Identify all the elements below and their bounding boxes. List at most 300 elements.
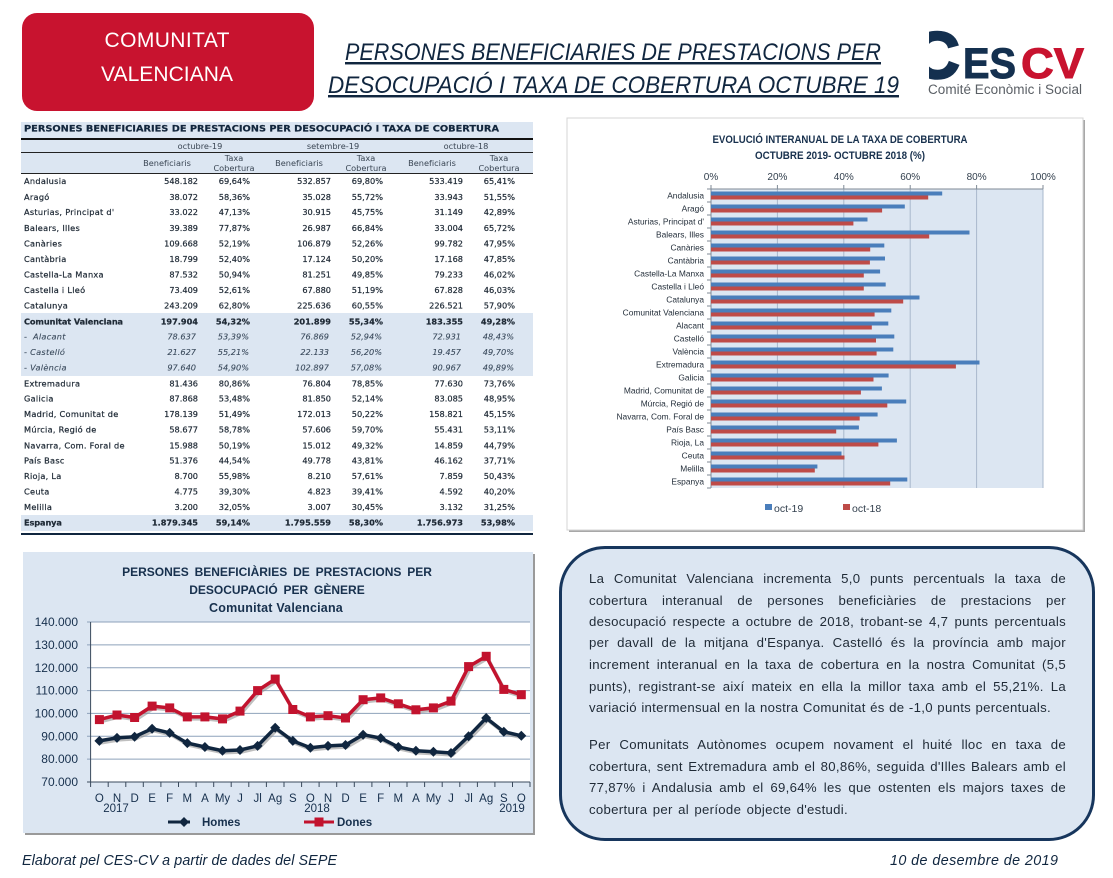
table row: País Basc: 43,81%	[352, 456, 383, 466]
line chart title	[122, 564, 432, 615]
line chart y axis labels: 80.000	[41, 752, 78, 766]
table row: Castelló: 49,70%	[483, 347, 514, 357]
table row: Alacant: 72.931	[432, 332, 461, 342]
table row: Castella i Lleó: 67.880	[302, 285, 331, 295]
bar chart title	[712, 133, 968, 162]
table row: Melilla: 3.200	[175, 502, 198, 512]
table header: Beneficiaris	[408, 158, 456, 168]
table header	[143, 141, 520, 173]
table row: Espanya: 1.756.973	[417, 518, 463, 528]
table row: Aragó: 51,55%	[484, 192, 515, 202]
commentary paragraph 2	[589, 737, 1066, 816]
table row: Comunitat Valenciana: 54,32%	[216, 316, 250, 326]
commentary paragraph 2: cobertura per al període objecte d'estudi.	[589, 802, 848, 816]
line chart x axis labels: 2019	[499, 803, 525, 815]
panel: line chart by gender	[23, 552, 535, 835]
table row: Aragó: 58,36%	[219, 192, 250, 202]
table row: València: - València	[24, 362, 67, 372]
table row: Alacant: 48,43%	[483, 332, 514, 342]
line chart x axis labels: Jl	[464, 793, 473, 805]
line chart legend: Dones	[337, 817, 372, 829]
table row: Extremadura: Extremadura	[24, 378, 80, 388]
table row: Cantàbria: 17.124	[302, 254, 331, 264]
table row: Asturias: Asturias, Principat d'	[24, 207, 114, 217]
table row: Madrid: 50,22%	[352, 409, 383, 419]
bar chart axis labels: 80%	[967, 172, 987, 183]
bar chart category labels: Castelló	[674, 334, 704, 344]
line: Dones	[99, 656, 521, 720]
table row: Comunitat Valenciana: 49,28%	[481, 316, 515, 326]
table row: Melilla	[24, 502, 515, 512]
table row: València: 90.967	[432, 362, 462, 372]
bar chart category labels: Rioja, La	[671, 438, 704, 448]
table header: setembre-19	[307, 141, 359, 151]
bar chart category labels: Comunitat Valenciana	[623, 308, 704, 318]
line chart y axis labels: 90.000	[41, 730, 78, 744]
bar chart category labels: Extremadura	[656, 360, 704, 370]
region badge: Comunitat Valenciana: COMUNITAT	[104, 29, 230, 52]
table header: Taxa	[356, 153, 375, 163]
commentary paragraph 1: per davall de la mitjana d'Espanya. Castelló és la província amb major	[589, 635, 1066, 650]
commentary paragraph 1: variació intermensual en la nostra Comunitat és de -1,0 punts percentuals.	[589, 700, 1051, 715]
table row: Catalunya: Catalunya	[24, 300, 68, 310]
line chart y axis labels: 120.000	[35, 661, 78, 675]
table row: Cantàbria: 47,85%	[484, 254, 515, 264]
table row: Navarra: 15.012	[302, 440, 331, 450]
table row: Castella-La Manxa: 49,85%	[352, 270, 383, 280]
table row: Balears: 65,72%	[484, 223, 515, 233]
table row: Múrcia: Múrcia, Regió de	[24, 424, 97, 434]
table row: València: 102.897	[295, 362, 330, 372]
table row: Ceuta: 40,20%	[484, 486, 515, 496]
line chart legend	[168, 817, 372, 829]
bar chart category labels: Melilla	[680, 464, 704, 474]
table row: Espanya: 58,30%	[349, 518, 383, 528]
table row: Castelló: 19.457	[432, 347, 462, 357]
table row: Catalunya: 226.521	[429, 300, 463, 310]
line chart x axis labels	[95, 793, 526, 815]
logo: CES-CV: CV	[1021, 40, 1084, 88]
table row: Extremadura: 73,76%	[484, 378, 515, 388]
table header: Taxa	[224, 153, 243, 163]
table row: Aragó: 38.072	[169, 192, 198, 202]
table row: Múrcia	[24, 424, 515, 434]
table row: Múrcia: 57.606	[302, 424, 331, 434]
table row: Cantàbria: 18.799	[169, 254, 198, 264]
bar chart category labels: Madrid, Comunitat de	[624, 386, 704, 396]
bars: oct-19	[711, 192, 980, 482]
table row: Comunitat Valenciana: 183.355	[426, 316, 463, 326]
line chart y axis labels: 70.000	[41, 775, 78, 789]
table row: Madrid: Madrid, Comunitat de	[24, 409, 119, 419]
bar chart category labels: Andalusia	[667, 190, 704, 200]
table row: Comunitat Valenciana: 55,34%	[349, 316, 383, 326]
region badge: Comunitat Valenciana: VALENCIANA	[101, 63, 233, 86]
commentary paragraph 1: increment interanual en la taxa de cobertura en la nostra Comunitat (5,5	[589, 657, 1066, 672]
table row: Andalusia: 69,64%	[219, 176, 250, 186]
table row: Castelló: 55,21%	[218, 347, 249, 357]
table row: Andalusia: 65,41%	[484, 176, 515, 186]
table row: Melilla: Melilla	[24, 502, 52, 512]
table row: Múrcia: 53,11%	[484, 424, 515, 434]
logo: CES-CV: C	[912, 18, 960, 92]
table row: Alacant: - Alacant	[24, 332, 66, 342]
table row: Múrcia: 55.431	[434, 424, 463, 434]
main title: PERSONES BENEFICIARIES DE PRESTACIONS PER	[345, 39, 881, 66]
table row: Melilla: 30,45%	[352, 502, 383, 512]
line chart title: Comunitat Valenciana	[209, 601, 344, 615]
table row: Aragó: 33.943	[434, 192, 463, 202]
table row: Galicia	[24, 394, 515, 404]
table row: Rioja: Rioja, La	[24, 471, 62, 481]
table row: Castella i Lleó	[24, 285, 515, 295]
bar chart axis labels: 0%	[704, 172, 718, 183]
table row: Ceuta	[24, 486, 515, 496]
table row: Castella i Lleó: 52,61%	[219, 285, 250, 295]
data table	[21, 122, 533, 535]
bar chart category labels: Ceuta	[682, 450, 704, 460]
bar chart axis labels: 100%	[1030, 172, 1056, 183]
table row: Comunitat Valenciana: Comunitat Valenciana	[24, 316, 123, 326]
region badge: Comunitat Valenciana	[22, 13, 314, 111]
line chart x axis labels: S	[500, 793, 508, 805]
line chart x axis labels: F	[166, 793, 173, 805]
bar chart title: OCTUBRE 2019- OCTUBRE 2018 (%)	[755, 150, 925, 162]
table row: País Basc: 46.162	[434, 456, 463, 466]
panel: bar chart, coverage rate	[567, 118, 1085, 532]
table row: Canàries: 106.879	[297, 238, 331, 248]
table row: Castella-La Manxa: 79.233	[434, 270, 463, 280]
table row: Cantàbria: Cantàbria	[24, 254, 67, 264]
table row: Castella i Lleó: 73.409	[169, 285, 198, 295]
table row: Ceuta: 39,30%	[219, 486, 250, 496]
table row: Melilla: 31,25%	[484, 502, 515, 512]
table header: Cobertura	[213, 163, 255, 173]
table row: Alacant: 78.637	[167, 332, 197, 342]
table row: Comunitat Valenciana: 197.904	[161, 316, 198, 326]
table row: País Basc: 49.778	[302, 456, 331, 466]
table row: Espanya: 1.795.559	[285, 518, 331, 528]
bar chart category labels: Navarra, Com. Foral de	[616, 412, 704, 422]
line chart x axis labels: D	[341, 793, 350, 805]
table row: Castella-La Manxa	[24, 270, 515, 280]
line chart x axis labels: Ag	[479, 793, 493, 805]
table row: Castella i Lleó: 46,03%	[484, 285, 515, 295]
line chart x axis labels: Ag	[268, 793, 282, 805]
table row: Navarra: 49,32%	[352, 440, 383, 450]
table row: Catalunya: 225.636	[297, 300, 331, 310]
table row: Galicia: 87.868	[169, 394, 198, 404]
line chart y axis labels: 130.000	[35, 638, 78, 652]
line chart x axis labels: M	[394, 793, 403, 805]
table row: Navarra: 15.988	[169, 440, 198, 450]
table row: Ceuta: 4.775	[175, 486, 198, 496]
commentary paragraph 1	[589, 571, 1066, 715]
table row: Castelló: 56,20%	[351, 347, 382, 357]
table row: Asturias	[24, 207, 515, 217]
table row: Catalunya: 60,55%	[352, 300, 383, 310]
main title	[328, 39, 899, 99]
bar chart category labels: Aragó	[682, 204, 704, 214]
line chart y axis labels: 140.000	[35, 615, 78, 629]
table row: Extremadura: 78,85%	[352, 378, 383, 388]
logo: CES-CV: Comité Econòmic i Social	[928, 82, 1082, 97]
table row: Extremadura: 80,86%	[219, 378, 250, 388]
table row: País Basc: 44,54%	[219, 456, 250, 466]
table row: Madrid	[24, 409, 515, 419]
table row: Rioja	[24, 471, 515, 481]
table row: Melilla: 3.132	[440, 502, 463, 512]
line chart x axis labels: O	[95, 793, 104, 805]
table row: Navarra: 44,79%	[484, 440, 515, 450]
table row: Canàries: 109.668	[164, 238, 198, 248]
table header: octubre-19	[178, 141, 222, 151]
commentary paragraph 1: desocupació respecte a octubre de 2018, trobant-se 4,7 punts percentuals	[589, 614, 1066, 629]
table row: Espanya	[24, 518, 515, 528]
line chart x axis labels: O	[306, 793, 315, 805]
line chart x axis labels: E	[148, 793, 156, 805]
bars: oct-18	[711, 196, 956, 486]
table row: Canàries: Canàries	[24, 238, 62, 248]
bar chart category labels: Catalunya	[666, 294, 704, 304]
bar chart category labels: País Basc	[666, 424, 704, 434]
table row: Andalusia: 69,80%	[352, 176, 383, 186]
table row: Alacant	[24, 332, 514, 342]
line chart x axis labels: M	[183, 793, 192, 805]
table row: Múrcia: 58,78%	[219, 424, 250, 434]
table row: Aragó: 35.028	[302, 192, 331, 202]
table row: Aragó: 55,72%	[352, 192, 383, 202]
table header: Beneficiaris	[275, 158, 323, 168]
table row: Castelló: - Castelló	[24, 347, 65, 357]
table row: Asturias: 33.022	[169, 207, 198, 217]
main title: DESOCUPACIÓ I TAXA DE COBERTURA OCTUBRE 19	[328, 72, 899, 99]
bar chart title: EVOLUCIÓ INTERANUAL DE LA TAXA DE COBERTURA	[712, 133, 968, 146]
table row: Comunitat Valenciana: 201.899	[294, 316, 331, 326]
table row: Madrid: 51,49%	[219, 409, 250, 419]
bar chart category labels: Espanya	[671, 476, 704, 486]
commentary paragraph 1: cobertura interanual de persones beneficiàries de prestacions per	[589, 592, 1066, 608]
table row: Madrid: 178.139	[164, 409, 198, 419]
table row: Balears: Balears, Illes	[24, 223, 80, 233]
table row: Canàries: 47,95%	[484, 238, 515, 248]
table row: Castella-La Manxa: 81.251	[302, 270, 331, 280]
table row: Madrid: 172.013	[297, 409, 331, 419]
table row: Andalusia: 548.182	[164, 176, 198, 186]
table row: Castella i Lleó: 67.828	[434, 285, 463, 295]
table row: Ceuta: Ceuta	[24, 486, 50, 496]
line chart x axis labels: 2018	[304, 803, 330, 815]
table row: Ceuta: 39,41%	[352, 486, 383, 496]
table row: Melilla: 3.007	[308, 502, 331, 512]
table row: Castella i Lleó: 51,19%	[352, 285, 383, 295]
line chart x axis labels: A	[201, 793, 209, 805]
bar chart category labels	[616, 190, 705, 486]
table header: Cobertura	[478, 163, 520, 173]
table row: Cantàbria: 17.168	[434, 254, 463, 264]
table row: Extremadura	[24, 378, 515, 388]
table row: Andalusia: Andalusia	[24, 176, 67, 186]
table row: Balears: 39.389	[169, 223, 198, 233]
line chart legend: Homes	[202, 817, 240, 829]
table row: Navarra: 14.859	[434, 440, 463, 450]
table row: Múrcia: 59,70%	[352, 424, 383, 434]
commentary paragraph 2: cobertura, sent Extremadura amb el 80,86%, seguida d'Illes Balears amb el	[589, 758, 1066, 774]
table row: País Basc: 51.376	[169, 456, 198, 466]
line chart x axis labels: E	[359, 793, 367, 805]
table row: València: 54,90%	[218, 362, 249, 372]
table row: Canàries: 52,19%	[219, 238, 250, 248]
table row: Andalusia: 532.857	[297, 176, 331, 186]
table row: Balears: 26.987	[302, 223, 331, 233]
table row: Alacant: 52,94%	[351, 332, 382, 342]
line chart x axis labels: Jl	[253, 793, 262, 805]
line chart x axis labels: J	[237, 793, 243, 805]
table header: Beneficiaris	[143, 158, 191, 168]
bar chart category labels: Balears, Illes	[656, 230, 704, 240]
table row: Asturias: 31.149	[434, 207, 463, 217]
table row: Navarra	[24, 440, 515, 450]
table row: Galicia: 83.085	[434, 394, 463, 404]
table row: Cantàbria: 52,40%	[219, 254, 250, 264]
bar chart category labels: Asturias, Principat d'	[628, 216, 704, 226]
table row: Asturias: 42,89%	[484, 207, 515, 217]
line chart y axis labels: 100.000	[35, 706, 78, 720]
line chart x axis labels: D	[130, 793, 139, 805]
table row: València	[24, 362, 514, 372]
table row: Aragó	[24, 192, 515, 202]
line chart x axis labels: 2017	[103, 803, 129, 815]
commentary paragraph 2: Per Comunitats Autònomes ocupem novament el huité lloc en taxa de	[589, 737, 1066, 752]
table row: Asturias: 30.915	[302, 207, 331, 217]
line chart x axis labels: J	[448, 793, 454, 805]
bar chart axis labels: 20%	[767, 172, 788, 183]
table row: País Basc: 37,71%	[484, 456, 515, 466]
table row: Cantàbria	[24, 254, 515, 264]
table title: PERSONES BENEFICIARIES DE PRESTACIONS PER DESOCUPACIÓ I TAXA DE COBERTURA	[24, 122, 499, 134]
table row: Extremadura: 76.804	[302, 378, 331, 388]
table row: Asturias: 47,13%	[219, 207, 250, 217]
line chart title: DESOCUPACIÓ PER GÈNERE	[189, 582, 365, 597]
table row: País Basc	[24, 456, 515, 466]
line chart x axis labels: A	[412, 793, 420, 805]
table row: València: 97.640	[167, 362, 196, 372]
table row: Comunitat Valenciana	[24, 316, 515, 326]
table row: Castella-La Manxa: Castella-La Manxa	[24, 270, 104, 280]
table row: Galicia: 53,48%	[219, 394, 250, 404]
bar chart axis labels: 60%	[900, 172, 920, 183]
table row: Rioja: 7.859	[440, 471, 463, 481]
table row: Catalunya	[24, 300, 515, 310]
line chart y axis labels	[35, 615, 78, 789]
line chart y axis labels: 110.000	[36, 684, 78, 698]
bar chart category labels: Castella-La Manxa	[634, 268, 704, 278]
table row: Espanya: 1.879.345	[152, 518, 198, 528]
line: Homes	[99, 718, 521, 753]
bar chart category labels: Galicia	[678, 372, 704, 382]
table row: Rioja: 55,98%	[219, 471, 250, 481]
table row: Andalusia	[24, 176, 515, 186]
table row: Canàries	[24, 238, 515, 248]
table row: València: 57,08%	[351, 362, 382, 372]
table row: Castella-La Manxa: 46,02%	[484, 270, 515, 280]
table row: Canàries: 52,26%	[352, 238, 383, 248]
table row: País Basc: País Basc	[24, 456, 65, 466]
table row: Melilla: 32,05%	[219, 502, 250, 512]
bar chart legend: oct-18	[852, 503, 881, 515]
logo: CES-CV	[928, 30, 1084, 94]
table row: Ceuta: 4.592	[440, 486, 463, 496]
table row: Espanya: 53,98%	[481, 518, 515, 528]
line chart x axis labels: O	[517, 793, 526, 805]
table row: Canàries: 99.782	[434, 238, 463, 248]
table row: Rioja: 57,61%	[352, 471, 383, 481]
table row: Galicia: Galicia	[24, 394, 54, 404]
table row: Balears: 66,84%	[352, 223, 383, 233]
table row: Balears: 77,87%	[219, 223, 250, 233]
line chart x axis labels: F	[377, 793, 384, 805]
table row: Ceuta: 4.823	[308, 486, 331, 496]
logo: CES-CV: ES	[963, 40, 1016, 88]
table row: Castella-La Manxa: 50,94%	[219, 270, 250, 280]
table header: octubre-18	[444, 141, 488, 151]
bar chart category labels: València	[672, 346, 704, 356]
table row: Castelló	[24, 347, 514, 357]
table row: Rioja: 8.700	[175, 471, 198, 481]
table row: Aragó: Aragó	[24, 192, 50, 202]
bar chart category labels: Alacant	[676, 320, 705, 330]
table row: Balears	[24, 223, 515, 233]
table row: Galicia: 52,14%	[352, 394, 383, 404]
table row: Balears: 33.004	[434, 223, 463, 233]
line shadows	[101, 658, 523, 755]
line chart x axis labels: S	[289, 793, 297, 805]
table row: Espanya: Espanya	[24, 518, 62, 528]
table row: Castelló: 22.133	[300, 347, 329, 357]
table row: Alacant: 76.869	[300, 332, 329, 342]
line chart x axis labels: My	[215, 793, 230, 805]
table row: Andalusia: 533.419	[429, 176, 463, 186]
table row: Catalunya: 243.209	[164, 300, 198, 310]
table row: Navarra: Navarra, Com. Foral de	[24, 440, 125, 450]
line chart x axis labels: N	[324, 793, 332, 805]
table row: Alacant: 53,39%	[218, 332, 249, 342]
table header: Taxa	[489, 153, 508, 163]
line chart x axis labels: My	[426, 793, 441, 805]
bar chart axis labels	[704, 172, 1056, 183]
bar chart category labels: Canàries	[670, 242, 704, 252]
footer: source: Elaborat pel CES-CV a partir de dades del SEPE	[22, 853, 337, 869]
table header: Cobertura	[345, 163, 387, 173]
table row: Catalunya: 62,80%	[219, 300, 250, 310]
table row: Extremadura: 77.630	[434, 378, 463, 388]
table row: Navarra: 50,19%	[219, 440, 250, 450]
table row: Rioja: 8.210	[308, 471, 331, 481]
table row: Madrid: 158.821	[429, 409, 463, 419]
table row: Cantàbria: 50,20%	[352, 254, 383, 264]
table row: València: 49,89%	[483, 362, 514, 372]
table row: Castella-La Manxa: 87.532	[169, 270, 198, 280]
line chart title: PERSONES BENEFICIÀRIES DE PRESTACIONS PER	[122, 564, 432, 579]
table row: Galicia: 48,95%	[484, 394, 515, 404]
table row: Castella i Lleó: Castella i Lleó	[24, 285, 85, 295]
commentary paragraph 1: La Comunitat Valenciana incrementa 5,0 punts percentuals la taxa de	[589, 571, 1066, 586]
table row: Madrid: 45,15%	[484, 409, 515, 419]
bar chart legend	[765, 503, 881, 515]
table row: Galicia: 81.850	[302, 394, 331, 404]
line chart x axis labels: N	[113, 793, 121, 805]
table row: Extremadura: 81.436	[169, 378, 198, 388]
